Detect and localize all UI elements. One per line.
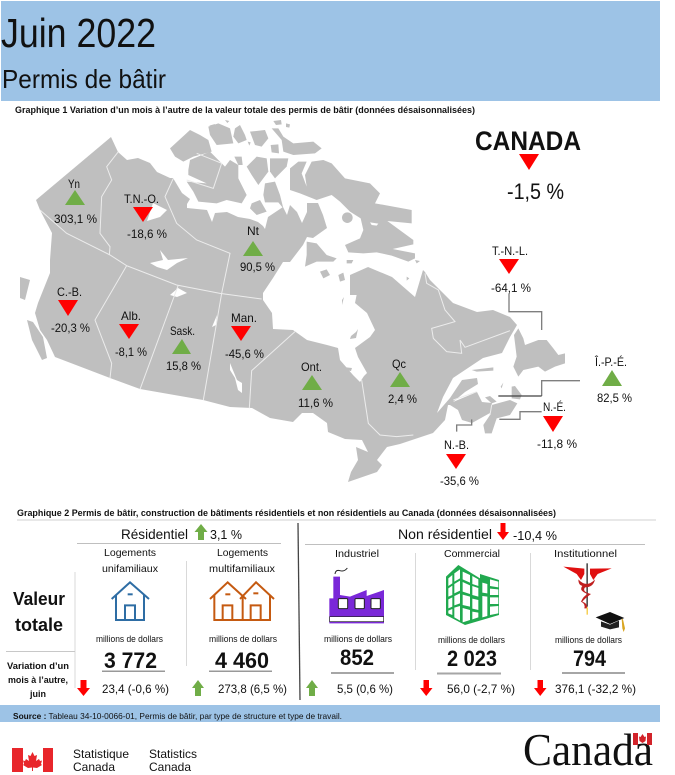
- label: Newfoundland and Labrador: -64,1 %: [491, 281, 531, 295]
- label: Quebec: Qc: [392, 357, 406, 371]
- label: Newfoundland and Labrador: [491, 244, 531, 295]
- heading: total value: [13, 589, 65, 635]
- column: industrial: 5,5 (0,6 %): [337, 682, 393, 696]
- lakes: [147, 203, 242, 393]
- label: Northwest Territories: T.N.-O.: [124, 192, 159, 206]
- icon: caduceus and graduation cap: [563, 563, 625, 632]
- residential heading: Résidentiel: [121, 526, 188, 542]
- heading: monthly change: [7, 661, 69, 700]
- label: Alberta: -8,1 %: [115, 345, 147, 359]
- column: multi-family: millions de dollars: [209, 634, 277, 644]
- label: British Columbia: -20,3 %: [51, 321, 90, 335]
- column: single-family: 3 772: [104, 648, 157, 673]
- Statistics Canada signature: Canada: [149, 760, 191, 774]
- label: Northwest Territories: [124, 192, 167, 241]
- label: Saskatchewan: 15,8 %: [166, 359, 201, 373]
- label: New Brunswick: N.-B.: [444, 438, 469, 452]
- up arrow: [192, 680, 204, 696]
- column: single-family: unifamiliaux: [102, 563, 159, 575]
- column: multi-family: 273,8 (6,5 %): [218, 682, 287, 696]
- label: Yukon: [54, 177, 97, 226]
- column: single-family: 23,4 (-0,6 %): [102, 682, 169, 696]
- leader lines: [457, 293, 580, 432]
- column: commercial: [420, 548, 515, 696]
- label: Saskatchewan: [166, 324, 201, 373]
- column: single-family: [77, 547, 169, 696]
- label: Ontario: Ont.: [301, 360, 322, 374]
- label: Alberta: [115, 309, 147, 359]
- heading: total value: totale: [15, 615, 63, 635]
- label: Newfoundland and Labrador: T.-N.-L.: [492, 244, 528, 258]
- icon: orange houses: [210, 582, 274, 620]
- label: Saskatchewan: Sask.: [170, 324, 195, 338]
- column: industrial: 852: [340, 645, 374, 670]
- residential heading: [77, 524, 281, 544]
- down arrow: [420, 680, 432, 696]
- label: Nova Scotia: -11,8 %: [537, 437, 577, 451]
- down arrow: [534, 680, 546, 696]
- column: institutional: millions de dollars: [555, 635, 622, 645]
- column: multi-family: multifamiliaux: [209, 563, 276, 575]
- label: Ontario: 11,6 %: [298, 396, 333, 410]
- heading: monthly change: juin: [29, 689, 46, 700]
- non-residential heading: -10,4 %: [513, 529, 557, 543]
- panel: residential: [77, 524, 287, 696]
- icon: factory: [329, 568, 384, 623]
- national figure: Canada: -1,5 %: [507, 179, 564, 204]
- column: multi-family: 4 460: [215, 648, 269, 673]
- column: institutional: 376,1 (-32,2 %): [555, 682, 636, 696]
- non-residential heading: [305, 523, 645, 545]
- icon: Canadian flag: [12, 748, 53, 772]
- section divider: [298, 523, 300, 700]
- source band: [0, 705, 660, 722]
- label: British Columbia: C.-B.: [57, 285, 82, 299]
- Statistics Canada signature: [12, 747, 197, 774]
- label: New Brunswick: -35,6 %: [440, 474, 479, 488]
- column: single-family: Logements: [104, 547, 156, 559]
- Atlantic islands: [472, 328, 565, 433]
- label: Nunavut: Nt: [247, 224, 260, 238]
- header band: [1, 1, 660, 101]
- Statistics Canada signature: Statistique: [73, 747, 129, 761]
- label: Prince Edward Island: 82,5 %: [597, 391, 632, 405]
- column: single-family: millions de dollars: [96, 634, 163, 644]
- national figure: Canada: CANADA: [475, 126, 581, 156]
- panel: non-residential: [305, 523, 645, 696]
- source band: Source : Tableau 34-10-0066-01, Permis de bâtir, par type de structure et type de travail.: [13, 711, 342, 721]
- column: multi-family: Logements: [217, 547, 268, 559]
- panel: row headings: [6, 572, 76, 700]
- national figure: Canada: [475, 126, 581, 204]
- label: Quebec: 2,4 %: [388, 392, 417, 406]
- column: multi-family: [192, 547, 287, 696]
- label: Yukon: Yn: [68, 177, 80, 191]
- mainland: [35, 137, 517, 482]
- label: Quebec: [388, 357, 417, 406]
- column: institutional: 794: [573, 646, 607, 671]
- column: institutional: [534, 548, 636, 696]
- label: Nunavut: [240, 224, 275, 274]
- icon: wordmark flag: [633, 733, 652, 745]
- label: Manitoba: [225, 311, 264, 361]
- column: commercial: millions de dollars: [438, 635, 505, 645]
- label: Manitoba: Man.: [231, 311, 257, 325]
- Statistics Canada signature: Statistics: [149, 747, 197, 761]
- Canada wordmark: Canada: [523, 724, 653, 775]
- chart 1 heading: Graphique 1 Variation d’un mois à l’autre de la valeur totale des permis de bâtir (données désaisonnalisées): [15, 105, 475, 116]
- label: Manitoba: -45,6 %: [225, 347, 264, 361]
- column: industrial: Industriel: [335, 548, 379, 560]
- heading: monthly change: mois à l’autre,: [8, 675, 68, 686]
- chart 2 heading: Graphique 2 Permis de bâtir, construction de bâtiments résidentiels et non résidentiels au Canada (données désaisonnalisées): [17, 508, 556, 519]
- icon: blue house: [112, 582, 149, 620]
- column: commercial: 56,0 (-2,7 %): [447, 682, 515, 696]
- label: Ontario: [298, 360, 333, 410]
- column: commercial: 2 023: [447, 646, 497, 671]
- heading: total value: Valeur: [13, 589, 65, 609]
- up arrow: [306, 680, 318, 696]
- title: Juin 2022: [1, 10, 156, 56]
- provincial borders: [40, 152, 510, 437]
- icon: green building: [446, 565, 499, 625]
- label: Nunavut: 90,5 %: [240, 260, 275, 274]
- arctic islands: [170, 120, 420, 295]
- column: industrial: [306, 548, 394, 696]
- Hudson Bay islands: [342, 297, 358, 371]
- column: commercial: Commercial: [444, 548, 500, 560]
- non-residential heading: Non résidentiel: [398, 526, 492, 542]
- column: industrial: millions de dollars: [324, 634, 392, 644]
- column: institutional: Institutionnel: [554, 548, 617, 560]
- residential heading: 3,1 %: [210, 528, 242, 542]
- label: Yukon: 303,1 %: [54, 212, 97, 226]
- label: Alberta: Alb.: [121, 309, 141, 323]
- label: Northwest Territories: -18,6 %: [127, 227, 167, 241]
- label: British Columbia: [51, 285, 90, 335]
- subtitle: Permis de bâtir: [2, 64, 166, 94]
- Statistics Canada signature: Canada: [73, 760, 115, 774]
- label: Prince Edward Island: Î.-P.-É.: [594, 354, 627, 369]
- label: New Brunswick: [440, 438, 479, 488]
- map of Canada: [20, 120, 580, 482]
- label: Nova Scotia: [537, 399, 577, 451]
- down arrow: [77, 680, 90, 696]
- label: Nova Scotia: N.-É.: [543, 399, 566, 414]
- west coast islands: [20, 277, 47, 360]
- label: Prince Edward Island: [594, 354, 632, 405]
- heading: monthly change: Variation d’un: [7, 661, 69, 672]
